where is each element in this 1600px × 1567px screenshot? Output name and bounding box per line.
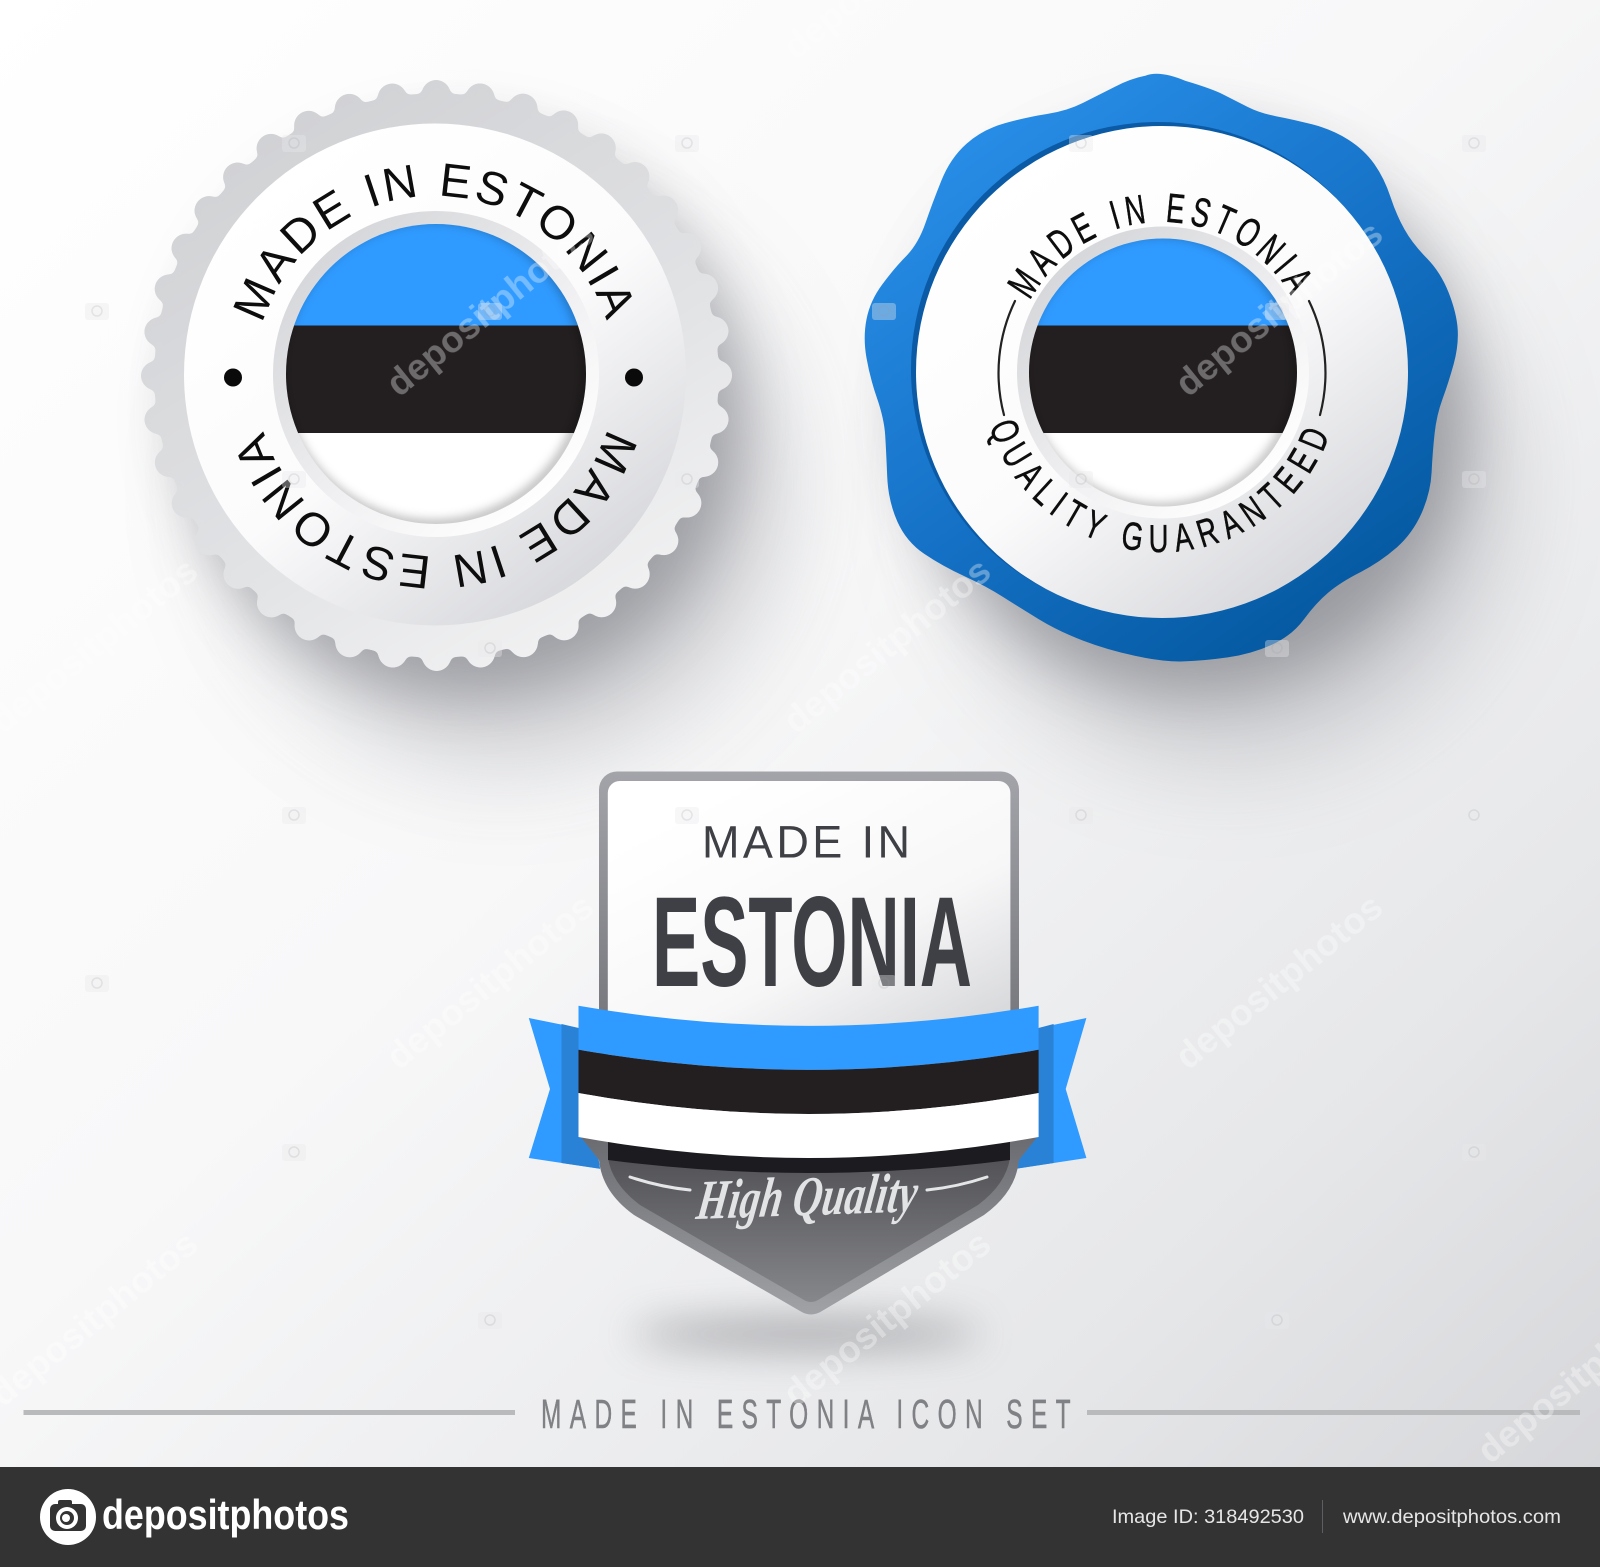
watermarks: depositphotos [775, 1223, 998, 1414]
icon: camera logo [40, 1489, 96, 1545]
serrated outer edge [154, 94, 718, 658]
right rule [1087, 1410, 1580, 1415]
badge: blue wavy seal [864, 74, 1536, 790]
image id: Image ID: 318492530 [1112, 1506, 1304, 1528]
watermarks: depositphotos [378, 213, 601, 404]
Estonian flag circle [1022, 232, 1301, 513]
watermark camera marks [85, 135, 1486, 1329]
shield lower pennant [580, 1130, 1038, 1314]
left rule [24, 1410, 515, 1415]
ribbon right tail [1016, 1018, 1086, 1169]
plate frame and white plate [599, 772, 1019, 1072]
heading: made in: MADE IN [702, 816, 910, 868]
website url: www.depositphotos.com [1342, 1506, 1561, 1528]
wavy blue edge [865, 74, 1458, 661]
curved text: bottom: MADE IN ESTONIA [238, 431, 637, 588]
disc crescent shadow [911, 122, 1405, 616]
badge: shield with ribbon [529, 772, 1086, 1348]
badge: silver serrated seal [141, 80, 816, 796]
white disc [916, 126, 1408, 618]
heading: estonia: ESTONIA [652, 871, 972, 1014]
shield ground shadow [631, 1320, 981, 1348]
inner white disc [184, 124, 686, 626]
watermarks: depositphotos [775, 550, 998, 741]
curved text: top: MADE IN ESTONIA [233, 164, 632, 321]
wavy seal drop shadow [904, 126, 1495, 750]
caption with rules [24, 1391, 1580, 1437]
watermarks: depositphotos [1167, 886, 1390, 1077]
script text: high quality: High Quality [692, 1162, 922, 1232]
flourish lines [630, 1177, 987, 1190]
ribbon left tail [529, 1018, 600, 1169]
watermarks: depositphotos [378, 886, 601, 1077]
watermarks: depositphotos [1167, 213, 1390, 404]
thin side arcs [999, 301, 1325, 415]
curved text: made in estonia: MADE IN ESTONIA [1006, 193, 1311, 299]
caption text: MADE IN ESTONIA ICON SET [541, 1391, 1079, 1437]
logo wordmark: depositphotos [102, 1491, 349, 1538]
flag ring [1017, 226, 1309, 518]
separator dots [224, 368, 643, 386]
footer divider [1322, 1500, 1323, 1533]
ribbon flag stripes [578, 1006, 1039, 1158]
Estonian flag circle [279, 217, 592, 528]
curved text: quality guaranteed: QUALITY GUARANTEED [987, 420, 1327, 553]
flag ring [273, 211, 599, 537]
footer bar [0, 1467, 1600, 1567]
seal drop shadow [178, 130, 775, 755]
